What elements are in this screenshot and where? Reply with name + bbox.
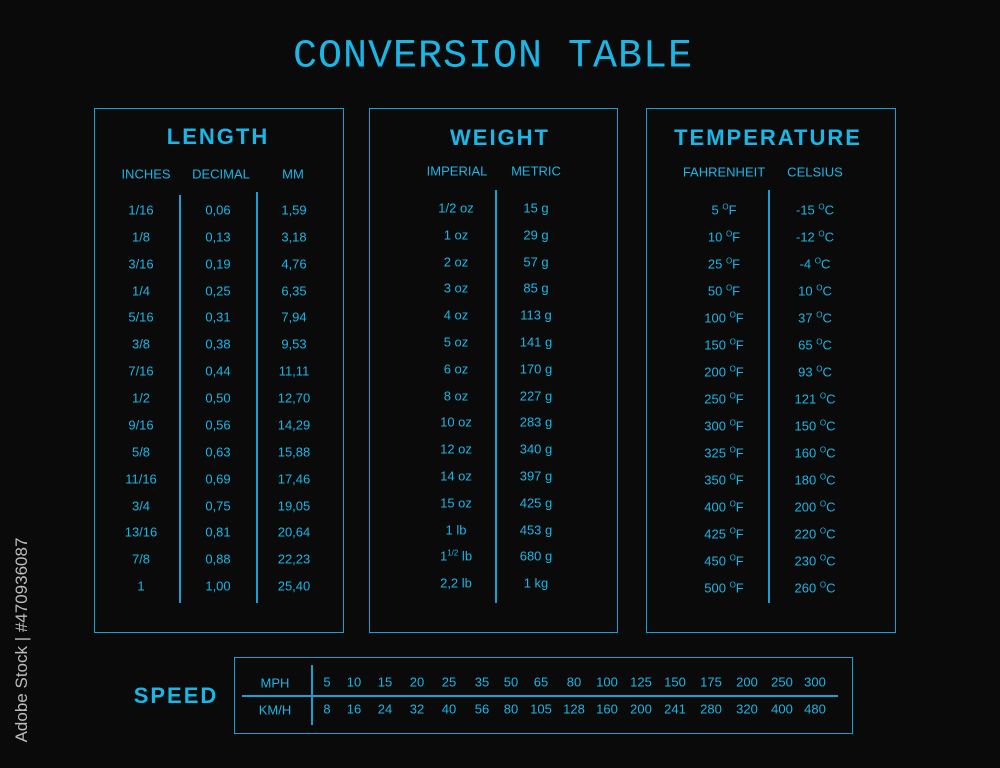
text: 4 oz bbox=[444, 308, 468, 322]
text: METRIC bbox=[511, 164, 561, 178]
text: 400 OF bbox=[704, 499, 744, 515]
text: 1/16 bbox=[128, 202, 154, 218]
text: 15 g bbox=[523, 200, 549, 216]
text: 500 OF bbox=[704, 580, 744, 596]
speed heading: SPEED bbox=[134, 683, 218, 708]
text: 0,44 bbox=[205, 364, 231, 378]
text: 10 OF bbox=[708, 229, 740, 245]
text: 1 oz bbox=[444, 228, 468, 242]
text: 0,50 bbox=[205, 390, 231, 406]
text: 320 bbox=[736, 702, 758, 716]
panel: temperature bbox=[646, 108, 896, 633]
text: 5/8 bbox=[132, 444, 150, 460]
text: 0,88 bbox=[205, 552, 231, 566]
text: 22,23 bbox=[278, 552, 310, 566]
text: 8 bbox=[323, 702, 331, 716]
text: 241 bbox=[664, 702, 686, 716]
text: 0,06 bbox=[205, 202, 231, 218]
text: 230 OC bbox=[795, 553, 835, 569]
text: 35 bbox=[475, 674, 489, 690]
text: 480 bbox=[804, 702, 826, 716]
text: 57 g bbox=[523, 254, 549, 270]
speed rows bbox=[259, 674, 826, 718]
panel: length bbox=[94, 108, 344, 633]
text: 2 oz bbox=[444, 254, 468, 270]
text: MM bbox=[282, 166, 304, 182]
text: 325 OF bbox=[704, 445, 744, 461]
text: 11/16 bbox=[125, 472, 157, 486]
text: 7,94 bbox=[281, 310, 307, 324]
text: 1,00 bbox=[205, 578, 231, 594]
text: 300 OF bbox=[704, 418, 744, 434]
text: 0,81 bbox=[205, 524, 231, 540]
temperature heading: TEMPERATURE bbox=[674, 125, 862, 150]
text: 250 OF bbox=[704, 391, 744, 407]
text: 5 oz bbox=[444, 334, 468, 350]
text: 80 bbox=[504, 702, 518, 716]
text: 65 bbox=[534, 674, 548, 690]
text: 25,40 bbox=[278, 578, 310, 594]
text: 150 OF bbox=[704, 337, 744, 353]
text: 5/16 bbox=[128, 310, 154, 324]
text: -15 OC bbox=[796, 202, 834, 218]
text: 1 bbox=[137, 578, 145, 594]
text: 105 bbox=[530, 702, 552, 716]
text: 283 g bbox=[520, 414, 552, 430]
text: 3/16 bbox=[128, 256, 154, 272]
text: 25 OF bbox=[708, 256, 740, 272]
text: 450 OF bbox=[704, 553, 744, 569]
text: 141 g bbox=[520, 334, 552, 350]
text: 14 oz bbox=[440, 468, 472, 484]
text: 1 lb bbox=[446, 522, 466, 538]
text: 175 bbox=[700, 674, 722, 690]
text: 200 OC bbox=[795, 499, 835, 515]
text: 180 OC bbox=[795, 472, 835, 488]
text: 3,18 bbox=[281, 230, 307, 244]
text: 19,05 bbox=[278, 498, 310, 514]
text: 113 g bbox=[520, 308, 552, 322]
text: FAHRENHEIT bbox=[683, 164, 765, 180]
text: 1 kg bbox=[524, 576, 548, 590]
text: 6 oz bbox=[444, 362, 468, 376]
text: 150 OC bbox=[795, 418, 835, 434]
panel: speed bbox=[234, 657, 853, 734]
text: 29 g bbox=[523, 228, 549, 242]
text: 20,64 bbox=[278, 524, 310, 540]
text: 0,19 bbox=[205, 256, 231, 272]
text: 350 OF bbox=[704, 472, 744, 488]
text: 40 bbox=[442, 702, 456, 716]
text: 8 oz bbox=[444, 388, 468, 404]
length column headers bbox=[121, 166, 304, 182]
text: 6,35 bbox=[281, 284, 307, 298]
text: 260 OC bbox=[795, 580, 835, 596]
temperature rows bbox=[704, 202, 835, 596]
text: 4,76 bbox=[281, 256, 307, 272]
text: 1/8 bbox=[132, 230, 150, 244]
text: 93 OC bbox=[798, 364, 832, 380]
text: MPH bbox=[261, 676, 289, 690]
text: 14,29 bbox=[278, 418, 310, 432]
text: 3 oz bbox=[444, 280, 468, 296]
text: 10 OC bbox=[798, 283, 832, 299]
text: 160 bbox=[596, 702, 618, 716]
text: 3/4 bbox=[132, 498, 150, 514]
weight column headers bbox=[427, 164, 561, 178]
text: 56 bbox=[475, 702, 489, 716]
text: 121 OC bbox=[795, 391, 835, 407]
text: -12 OC bbox=[796, 229, 834, 245]
text: 250 bbox=[771, 674, 793, 690]
text: 2,2 lb bbox=[440, 576, 472, 590]
text: 200 bbox=[630, 702, 652, 716]
text: 5 OF bbox=[711, 202, 737, 218]
text: 10 bbox=[347, 674, 361, 690]
panel: weight bbox=[369, 108, 618, 633]
text: 65 OC bbox=[798, 337, 832, 353]
text: INCHES bbox=[121, 166, 171, 182]
text: 15,88 bbox=[278, 444, 310, 460]
side watermark text: Adobe Stock | #470936087 bbox=[12, 538, 31, 742]
text: 0,63 bbox=[205, 444, 231, 460]
text: 15 bbox=[378, 674, 392, 690]
text: 425 g bbox=[520, 496, 552, 510]
text: 453 g bbox=[520, 522, 552, 538]
text: 80 bbox=[567, 674, 581, 690]
text: 0,31 bbox=[205, 310, 231, 324]
temperature column headers bbox=[683, 164, 843, 180]
text: 300 bbox=[804, 674, 826, 690]
text: 85 g bbox=[523, 280, 549, 296]
text: 0,13 bbox=[205, 230, 231, 244]
title: CONVERSION TABLE bbox=[293, 34, 693, 80]
text: 13/16 bbox=[125, 524, 157, 540]
text: 0,69 bbox=[205, 472, 231, 486]
text: 0,25 bbox=[205, 284, 231, 298]
text: 7/8 bbox=[132, 552, 150, 566]
text: 24 bbox=[378, 702, 392, 716]
text: 37 OC bbox=[798, 310, 832, 326]
text: 9/16 bbox=[128, 418, 154, 432]
text: 340 g bbox=[520, 442, 552, 456]
length heading: LENGTH bbox=[167, 124, 269, 149]
text: 100 bbox=[596, 674, 618, 690]
text: 227 g bbox=[520, 388, 552, 404]
text: 170 g bbox=[520, 362, 552, 376]
text: 50 bbox=[504, 674, 518, 690]
text: 11/2 lb bbox=[440, 548, 472, 564]
text: 680 g bbox=[520, 548, 552, 564]
text: 200 OF bbox=[704, 364, 744, 380]
text: 25 bbox=[442, 674, 456, 690]
text: 10 oz bbox=[440, 414, 472, 430]
text: 1,59 bbox=[281, 202, 307, 218]
text: 5 bbox=[323, 674, 331, 690]
text: 220 OC bbox=[795, 526, 835, 542]
text: 150 bbox=[664, 674, 686, 690]
text: 1/4 bbox=[132, 284, 150, 298]
text: 12 oz bbox=[440, 442, 472, 456]
text: 32 bbox=[410, 702, 424, 716]
text: 1/2 bbox=[132, 390, 150, 406]
text: 160 OC bbox=[795, 445, 835, 461]
text: KM/H bbox=[259, 702, 291, 718]
text: 1/2 oz bbox=[438, 200, 474, 216]
text: DECIMAL bbox=[192, 166, 250, 182]
text: 7/16 bbox=[128, 364, 154, 378]
text: 100 OF bbox=[704, 310, 744, 326]
text: 9,53 bbox=[281, 336, 307, 352]
text: 200 bbox=[736, 674, 758, 690]
text: 20 bbox=[410, 674, 424, 690]
text: 125 bbox=[630, 674, 652, 690]
text: 11,11 bbox=[279, 364, 309, 378]
weight heading: WEIGHT bbox=[450, 125, 550, 150]
text: 50 OF bbox=[708, 283, 740, 299]
text: 3/8 bbox=[132, 336, 150, 352]
weight rows bbox=[438, 200, 552, 590]
text: 12,70 bbox=[278, 390, 310, 406]
text: 15 oz bbox=[440, 496, 472, 510]
text: 425 OF bbox=[704, 526, 744, 542]
text: 280 bbox=[700, 702, 722, 716]
text: 0,38 bbox=[205, 336, 231, 352]
text: -4 OC bbox=[800, 256, 830, 272]
text: CELSIUS bbox=[787, 164, 843, 180]
text: 17,46 bbox=[278, 472, 310, 486]
text: 0,56 bbox=[205, 418, 231, 432]
text: 16 bbox=[347, 702, 361, 716]
text: IMPERIAL bbox=[427, 164, 487, 178]
text: 400 bbox=[771, 702, 793, 716]
text: 397 g bbox=[520, 468, 552, 484]
text: 128 bbox=[563, 702, 585, 716]
length rows bbox=[125, 202, 310, 594]
text: 0,75 bbox=[205, 498, 231, 514]
